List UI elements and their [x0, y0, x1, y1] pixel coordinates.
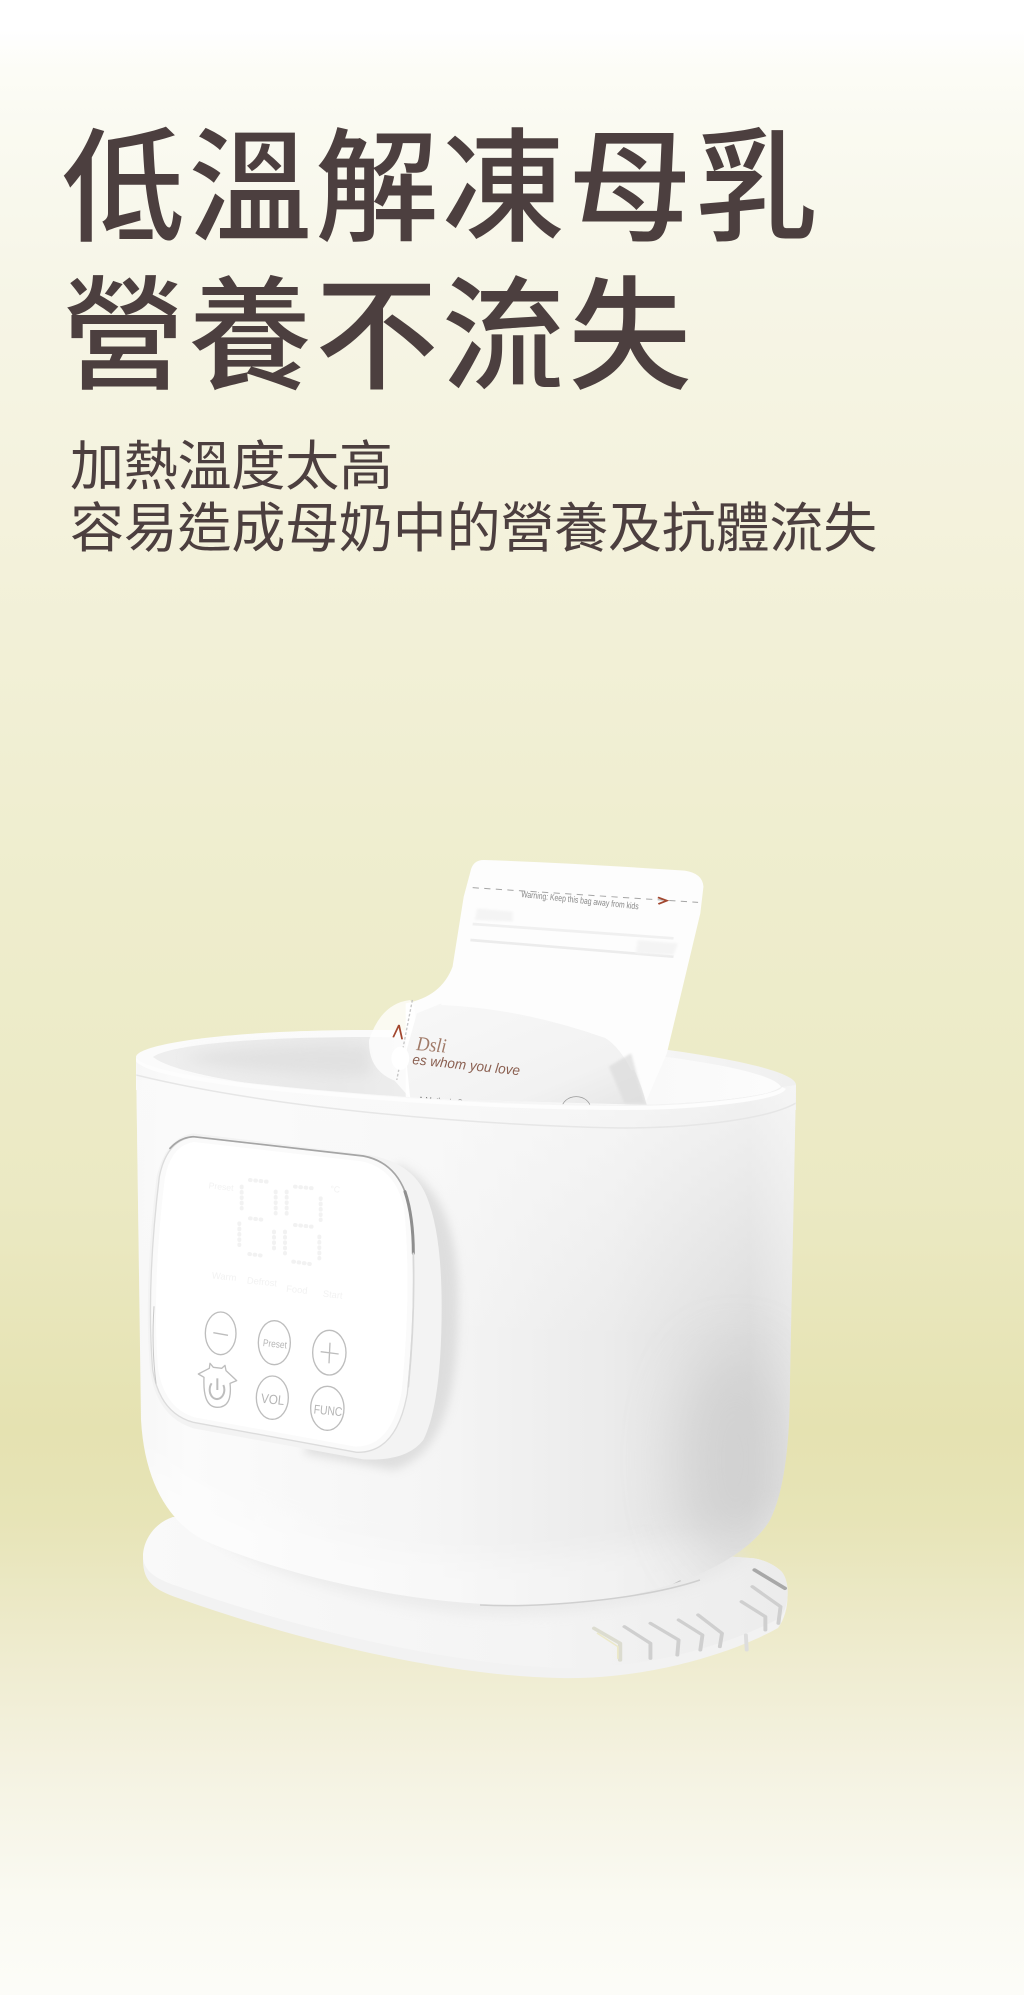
- touch screen: [156, 1142, 407, 1447]
- panel housing: [148, 1133, 442, 1460]
- vent slots: [594, 1570, 785, 1660]
- title: 低溫解凍母乳: [62, 89, 822, 267]
- warmer base plate: [143, 1500, 788, 1678]
- power icon: [198, 1363, 237, 1407]
- title: 營養不流失: [62, 237, 695, 415]
- FUNC button: FUNC: [313, 1402, 343, 1419]
- chrome highlights: [153, 1137, 414, 1387]
- bag logo script: Dsli: [415, 1033, 447, 1058]
- scissor marks: [658, 897, 667, 904]
- plus button: [313, 1330, 346, 1375]
- pouch seal circle: [562, 1097, 591, 1120]
- zipper lines: [470, 908, 678, 957]
- minus button: [205, 1312, 236, 1355]
- LED display: Warm: [211, 1270, 237, 1283]
- tear-line dashes: [473, 888, 698, 902]
- subtitle text: 容易造成母奶中的營養及抗體流失: [70, 484, 877, 563]
- bag slogan: es whom you love: [412, 1051, 521, 1078]
- LED display: Preset: [208, 1180, 235, 1193]
- control panel: [148, 1133, 458, 1470]
- LED display: °C: [330, 1184, 340, 1195]
- subtitle text: 加熱溫度太高: [70, 422, 393, 501]
- LED display: Start: [322, 1289, 343, 1301]
- bag left tab: [369, 1000, 419, 1103]
- panel housing shadow: [303, 1163, 458, 1470]
- LED display: Defrost: [246, 1275, 278, 1289]
- breast milk storage bag: [369, 860, 703, 1120]
- LED display: [208, 1180, 343, 1301]
- bag small print: A Mother's Care: [418, 1095, 475, 1108]
- VOL button: [256, 1376, 288, 1419]
- preset button: [258, 1321, 290, 1365]
- vent slots on body rear: [673, 1580, 681, 1584]
- chrome bezel: [150, 1137, 414, 1452]
- bag back sheet: [406, 860, 703, 1105]
- VOL button: VOL: [260, 1391, 285, 1408]
- subtitle text: [70, 422, 877, 563]
- lip edge highlight: [136, 1075, 796, 1128]
- bag warning text: Warning: Keep this bag away from kids: [521, 889, 640, 911]
- warmer rim and interior: [136, 1030, 796, 1110]
- LED display: Food: [286, 1284, 308, 1296]
- FUNC button: [311, 1386, 344, 1430]
- milk pouch: [406, 1003, 647, 1105]
- title: [62, 89, 822, 415]
- warmer body: [136, 1074, 796, 1606]
- preset button: Preset: [262, 1338, 288, 1352]
